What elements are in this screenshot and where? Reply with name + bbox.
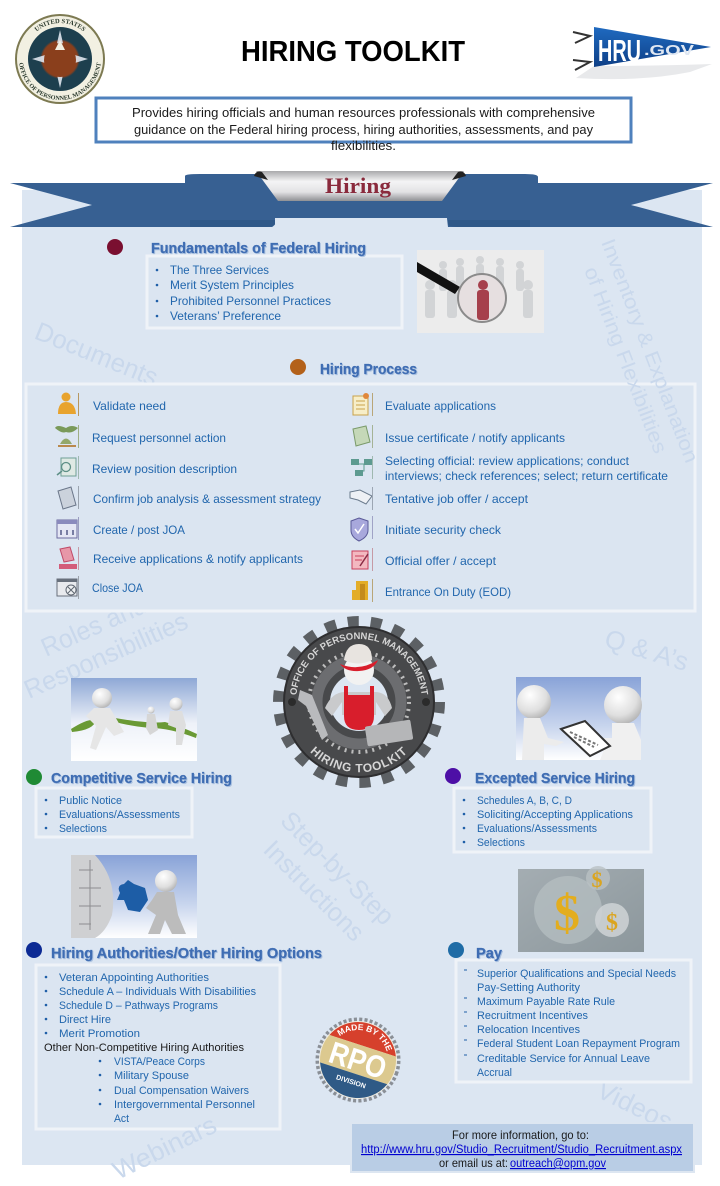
footer contact box: http://www.hru.gov/Studio_Recruitment/Studio_Recruitment.aspx (361, 1144, 682, 1156)
footer contact box: For more information, go to: (452, 1128, 589, 1142)
bullet list: The Three Services (170, 263, 269, 277)
step: request personnel action: Request personnel action (92, 431, 226, 445)
bullet list: Schedule A – Individuals With Disabilities (59, 986, 256, 998)
heading marker dot (445, 768, 461, 784)
step: validate need: Validate need (93, 399, 166, 413)
icon: tentative job offer handshake (350, 487, 373, 510)
icon: official offer (352, 548, 373, 571)
dashed list: Accrual (477, 1067, 512, 1079)
title: HIRING TOOLKIT (241, 36, 465, 68)
icon: selecting official (351, 456, 373, 479)
panel: Hiring Process (26, 359, 695, 611)
heading: Excepted Service Hiring (475, 771, 635, 787)
icon: receive applications (59, 547, 79, 570)
OPM seal logo (15, 14, 105, 104)
bullet list: Dual Compensation Waivers (114, 1085, 249, 1097)
image: puzzle and figure (71, 855, 197, 938)
intro text box (96, 98, 631, 153)
bullet list: Act (114, 1113, 129, 1125)
ribbon banner: Hiring: Hiring (325, 173, 391, 198)
step: receive applications: Receive applications & notify applicants (93, 552, 303, 566)
intro text box: flexibilities. (331, 139, 396, 153)
heading: Fundamentals of Federal Hiring (151, 241, 366, 257)
dashed list (456, 960, 691, 1082)
dashed list: Pay-Setting Authority (477, 982, 580, 994)
background panel (22, 190, 702, 1165)
OPM seal logo: OFFICE OF PERSONNEL MANAGEMENT (19, 62, 101, 100)
footer contact box: outreach@opm.gov (510, 1158, 606, 1170)
HRU.gov pennant logo (573, 27, 712, 79)
bullet list: Soliciting/Accepting Applications (477, 809, 633, 821)
bullet list: Other Non-Competitive Hiring Authorities (44, 1042, 244, 1054)
bullet list: Merit Promotion (59, 1028, 140, 1040)
image: dollar bubbles: $ (606, 910, 618, 936)
image: magnifier over crowd (417, 250, 544, 333)
icon: validate need (58, 392, 79, 416)
step: create post JOA: Create / post JOA (93, 523, 185, 537)
step: issue certificate: Issue certificate / notify applicants (385, 431, 565, 445)
step: official offer: Official offer / accept (385, 554, 497, 568)
process box (26, 384, 695, 611)
panel: Hiring Authorities / Other Hiring Options (26, 942, 322, 1129)
heading marker dot (26, 769, 42, 785)
watermark: of Hiring Flexibilities: of Hiring Flexibilities (579, 264, 671, 457)
watermark: Webinars: Webinars (107, 1109, 221, 1185)
heading marker dot (107, 239, 123, 255)
icon: issue certificate (353, 425, 373, 448)
icon: review position description (57, 456, 79, 479)
bullet list: Selections (59, 823, 107, 835)
dashed list: Recruitment Incentives (477, 1010, 588, 1022)
image: figures with clipboard (516, 677, 642, 760)
hiring toolkit gear emblem: OFFICE OF PERSONNEL MANAGEMENT (290, 632, 428, 694)
bullet list (454, 788, 651, 852)
dashed list: Superior Qualifications and Special Needs (477, 968, 676, 980)
bullet list: Intergovernmental Personnel (114, 1099, 255, 1111)
badge: made by the RPO division: DIVISION (335, 1074, 366, 1090)
HRU.gov pennant logo: HRU (598, 33, 641, 68)
icon: close JOA (57, 576, 79, 599)
ribbon banner: Hiring (10, 171, 713, 227)
bullet list: VISTA/Peace Corps (114, 1056, 205, 1068)
heading marker dot (26, 942, 42, 958)
icon: entrance on duty (352, 579, 373, 602)
watermark: Step-by-Step: Step-by-Step (275, 805, 401, 931)
icon: request personnel action (55, 425, 79, 448)
dashed list: Creditable Service for Annual Leave (477, 1053, 650, 1065)
panel: Pay (448, 942, 691, 1082)
step: entrance on duty: Entrance On Duty (EOD) (385, 585, 511, 599)
step: initiate security check: Initiate security check (385, 523, 502, 537)
bullet list (147, 256, 402, 328)
heading: Pay (476, 946, 502, 962)
hiring toolkit gear emblem (273, 616, 445, 788)
icon: evaluate applications (353, 393, 373, 416)
panel: Competitive Service Hiring (26, 769, 232, 837)
step: tentative job offer: Tentative job offer / accept (385, 492, 529, 506)
bullet list: Evaluations/Assessments (477, 823, 597, 835)
dashed list: Federal Student Loan Repayment Program (477, 1038, 680, 1050)
step: confirm job analysis: Confirm job analysis & assessment strategy (93, 492, 321, 506)
badge: made by the RPO division: RPO (325, 1035, 391, 1086)
badge: made by the RPO division: MADE BY THE (337, 1024, 392, 1052)
image: dollar bubbles: $ (592, 867, 602, 892)
bullet list: Direct Hire (59, 1014, 111, 1026)
heading marker dot (290, 359, 306, 375)
step: selecting official (385, 454, 668, 483)
step: review position description: Review position description (92, 462, 237, 476)
footer contact box: or email us at: (439, 1156, 508, 1170)
watermark: Roles and: Roles and (36, 590, 151, 662)
bullet list: Selections (477, 837, 525, 849)
icon: confirm job analysis (58, 486, 79, 509)
intro text box: guidance on the Federal hiring process, hiring authorities, assessments, and pay (134, 123, 594, 137)
bullet list: Veteran Appointing Authorities (59, 972, 210, 984)
bullet list: Veterans’ Preference (170, 309, 281, 323)
badge: made by the RPO division (316, 1018, 400, 1102)
bullet list (36, 965, 280, 1129)
heading: Hiring Process (320, 362, 417, 378)
bullet list (36, 788, 192, 837)
heading: Competitive Service Hiring (51, 771, 232, 787)
icon: create post JOA (57, 517, 79, 540)
watermark: Videos: Videos (592, 1074, 677, 1136)
step: selecting official: Selecting official: review applications; conduct (385, 454, 630, 468)
image: racers at finish line (71, 678, 197, 761)
step: close JOA: Close JOA (92, 581, 143, 595)
bullet list: Military Spouse (114, 1070, 189, 1082)
watermark: Inventory and Explanation: Inventory & Explanation (596, 236, 702, 466)
bullet list: Evaluations/Assessments (59, 809, 180, 821)
image: dollar bubbles: $ (554, 885, 580, 942)
watermark: Q and A's: Q & A’s (601, 623, 692, 677)
bullet list: Prohibited Personnel Practices (170, 294, 331, 308)
bullet list: Public Notice (59, 795, 122, 807)
watermark: Documents: Documents (31, 316, 163, 392)
icon: initiate security check shield (351, 516, 373, 541)
watermark: Instructions: Instructions (258, 834, 371, 947)
step: evaluate applications: Evaluate applications (385, 399, 496, 413)
image: dollar bubbles (518, 866, 644, 952)
hiring toolkit gear emblem: HIRING TOOLKIT (310, 746, 406, 772)
heading: Hiring Authorities/Other Hiring Options (51, 946, 322, 962)
dashed list: Maximum Payable Rate Rule (477, 996, 615, 1008)
panel: Fundamentals of Federal Hiring (107, 239, 402, 328)
heading marker dot (448, 942, 464, 958)
HRU.gov pennant logo: .GOV (644, 42, 694, 59)
step: selecting official: interviews; check references; select; return certificate (385, 469, 668, 483)
bullet list: Schedules A, B, C, D (477, 795, 572, 807)
panel: Excepted Service Hiring (445, 768, 651, 852)
watermark: Responsibilities: Responsibilities (19, 605, 192, 704)
bullet list: Schedule D – Pathways Programs (59, 1000, 218, 1012)
OPM seal logo: UNITED STATES (34, 18, 86, 31)
intro text box: Provides hiring officials and human resources professionals with comprehensive (132, 106, 595, 120)
bullet list: Merit System Principles (170, 278, 294, 292)
footer contact box (351, 1123, 694, 1172)
dashed list: Relocation Incentives (477, 1024, 580, 1036)
